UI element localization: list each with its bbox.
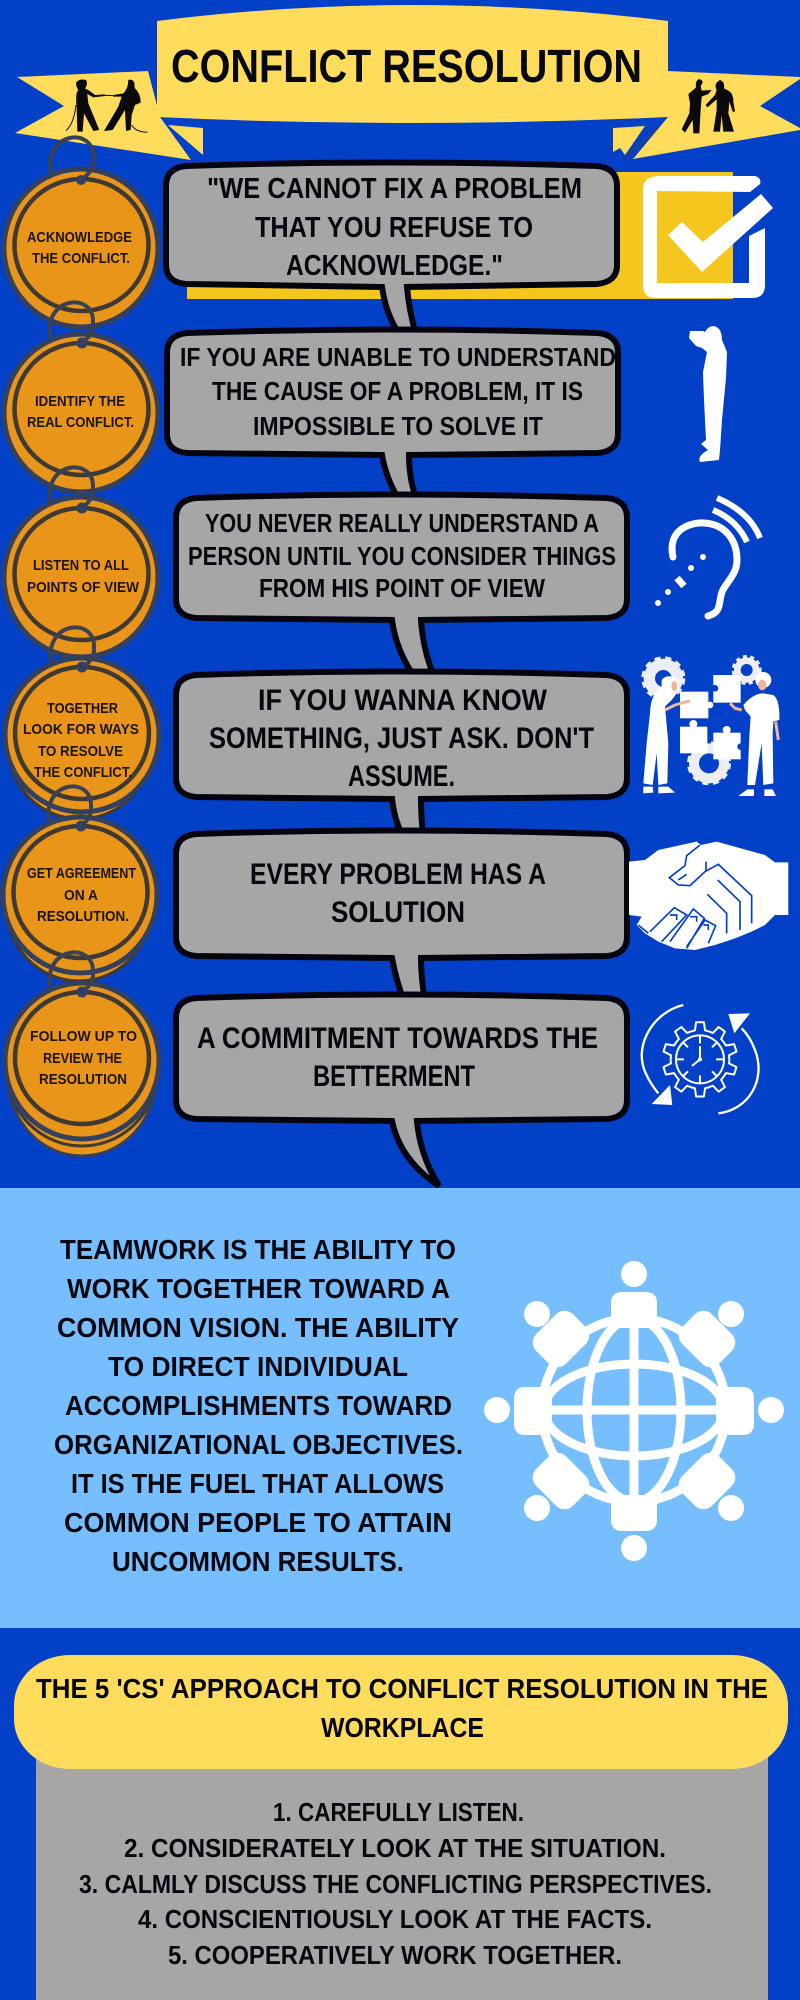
- step tag 4: [5, 627, 159, 819]
- quote 1 text: "WE CANNOT FIX A PROBLEM: [207, 173, 582, 205]
- step tag 1: THE CONFLICT.: [32, 250, 130, 267]
- panel: speech bubble 4: [176, 672, 627, 835]
- teamwork paragraph: COMMON PEOPLE TO ATTAIN: [64, 1507, 452, 1538]
- quote 2 text: THE CAUSE OF A PROBLEM, IT IS: [212, 376, 583, 406]
- teamwork paragraph: IT IS THE FUEL THAT ALLOWS: [71, 1468, 444, 1499]
- quote 1 text: THAT YOU REFUSE TO: [255, 212, 533, 244]
- five Cs list: 4. CONSCIENTIOUSLY LOOK AT THE FACTS.: [138, 1904, 652, 1934]
- step tag 6: REVIEW THE: [43, 1050, 122, 1067]
- five Cs list: 5. COOPERATIVELY WORK TOGETHER.: [168, 1940, 622, 1970]
- teamwork paragraph: TO DIRECT INDIVIDUAL: [108, 1351, 408, 1382]
- step tag 2: [4, 302, 158, 493]
- teamwork paragraph: TEAMWORK IS THE ABILITY TO: [60, 1234, 456, 1265]
- teamwork paragraph: [54, 1234, 463, 1577]
- step tag 4: THE CONFLICT.: [34, 764, 132, 781]
- step tag 4: TO RESOLVE: [38, 743, 123, 760]
- quote 4 text: [209, 684, 594, 793]
- quote 2 text: IF YOU ARE UNABLE TO UNDERSTAND: [180, 342, 616, 372]
- five Cs list: 2. CONSIDERATELY LOOK AT THE SITUATION.: [124, 1833, 666, 1863]
- step tag 2: IDENTIFY THE: [35, 393, 125, 410]
- teamwork paragraph: WORK TOGETHER TOWARD A: [67, 1273, 450, 1304]
- panel: the 5 Cs grey card: [36, 1740, 768, 2000]
- title text: CONFLICT RESOLUTION: [171, 40, 642, 92]
- step tag 3: LISTEN TO ALL: [33, 557, 129, 574]
- heading text: WORKPLACE: [321, 1712, 484, 1743]
- panel: speech bubble 1: [166, 162, 617, 335]
- teamwork paragraph: ACCOMPLISHMENTS TOWARD: [65, 1390, 452, 1421]
- quote 6 text: A COMMITMENT TOWARDS THE: [197, 1022, 598, 1055]
- step tag 3: POINTS OF VIEW: [27, 579, 140, 596]
- panel: step tags column: [3, 137, 159, 1156]
- icon: tug of war silhouettes: [66, 79, 147, 132]
- panel: speech bubble 3: [176, 494, 627, 676]
- quote 3 text: PERSON UNTIL YOU CONSIDER THINGS: [188, 541, 616, 571]
- step tag 1: ACKNOWLEDGE: [27, 229, 132, 246]
- quote 6 text: BETTERMENT: [313, 1060, 475, 1093]
- quote 5 text: [250, 858, 546, 929]
- step tag 5: [3, 786, 157, 981]
- step tag 6: FOLLOW UP TO: [30, 1028, 137, 1045]
- icon: people around a globe: [484, 1261, 784, 1561]
- icon: clock gear with cycle arrows: [642, 1005, 759, 1113]
- step tag 4: TOGETHER: [47, 700, 118, 717]
- panel: quote 1 background and check box icon: [187, 172, 773, 299]
- step tag 1: [4, 137, 158, 327]
- teamwork paragraph: ORGANIZATIONAL OBJECTIVES.: [54, 1429, 463, 1460]
- step tag 4: LOOK FOR WAYS: [23, 721, 139, 738]
- teamwork paragraph: COMMON VISION. THE ABILITY: [57, 1312, 459, 1343]
- title banner: [15, 5, 800, 160]
- panel: speech bubble 5: [176, 830, 627, 1001]
- quote 4 text: ASSUME.: [348, 760, 455, 793]
- step tag 5: GET AGREEMENT: [27, 865, 136, 882]
- quote 4 text: IF YOU WANNA KNOW: [258, 684, 548, 717]
- step tag 6: [5, 952, 159, 1156]
- quote 5 text: EVERY PROBLEM HAS A: [250, 858, 546, 891]
- quote 2 text: [180, 342, 616, 441]
- panel: speech bubble 2: [167, 330, 618, 498]
- heading text: [36, 1673, 768, 1743]
- teamwork paragraph: UNCOMMON RESULTS.: [112, 1546, 404, 1577]
- step tag 5: RESOLUTION.: [37, 908, 129, 925]
- icon: two people talking silhouettes: [682, 79, 735, 133]
- quote 1 text: ACKNOWLEDGE.": [286, 250, 503, 282]
- quote 2 text: IMPOSSIBLE TO SOLVE IT: [253, 411, 543, 441]
- icon: ear with sound waves: [655, 498, 760, 616]
- step tag 5: ON A: [64, 887, 98, 904]
- quote 3 text: [188, 508, 616, 603]
- five Cs list: 1. CAREFULLY LISTEN.: [273, 1797, 524, 1827]
- panel: teamwork: [0, 1188, 800, 1628]
- quote 3 text: YOU NEVER REALLY UNDERSTAND A: [205, 508, 599, 538]
- five Cs list: [79, 1797, 712, 1970]
- quote 1 text: [207, 173, 582, 282]
- quote 6 text: [197, 1022, 598, 1093]
- quote 3 text: FROM HIS POINT OF VIEW: [259, 573, 545, 603]
- quote 5 text: SOLUTION: [331, 896, 465, 929]
- step tag 2: REAL CONFLICT.: [27, 414, 134, 431]
- icon: person with binoculars: [689, 326, 727, 462]
- icon: two people assembling puzzle and gears: [643, 657, 779, 796]
- step tag 3: [4, 467, 158, 657]
- panel: speech bubble 6: [176, 994, 627, 1186]
- panel: the 5 Cs heading pill: [14, 1655, 788, 1769]
- icon: check box: [643, 176, 773, 298]
- step tag 6: RESOLUTION: [39, 1071, 127, 1088]
- quote 4 text: SOMETHING, JUST ASK. DON'T: [209, 722, 594, 755]
- icon: handshake: [629, 842, 788, 950]
- five Cs list: 3. CALMLY DISCUSS THE CONFLICTING PERSPECTIVES.: [79, 1869, 712, 1899]
